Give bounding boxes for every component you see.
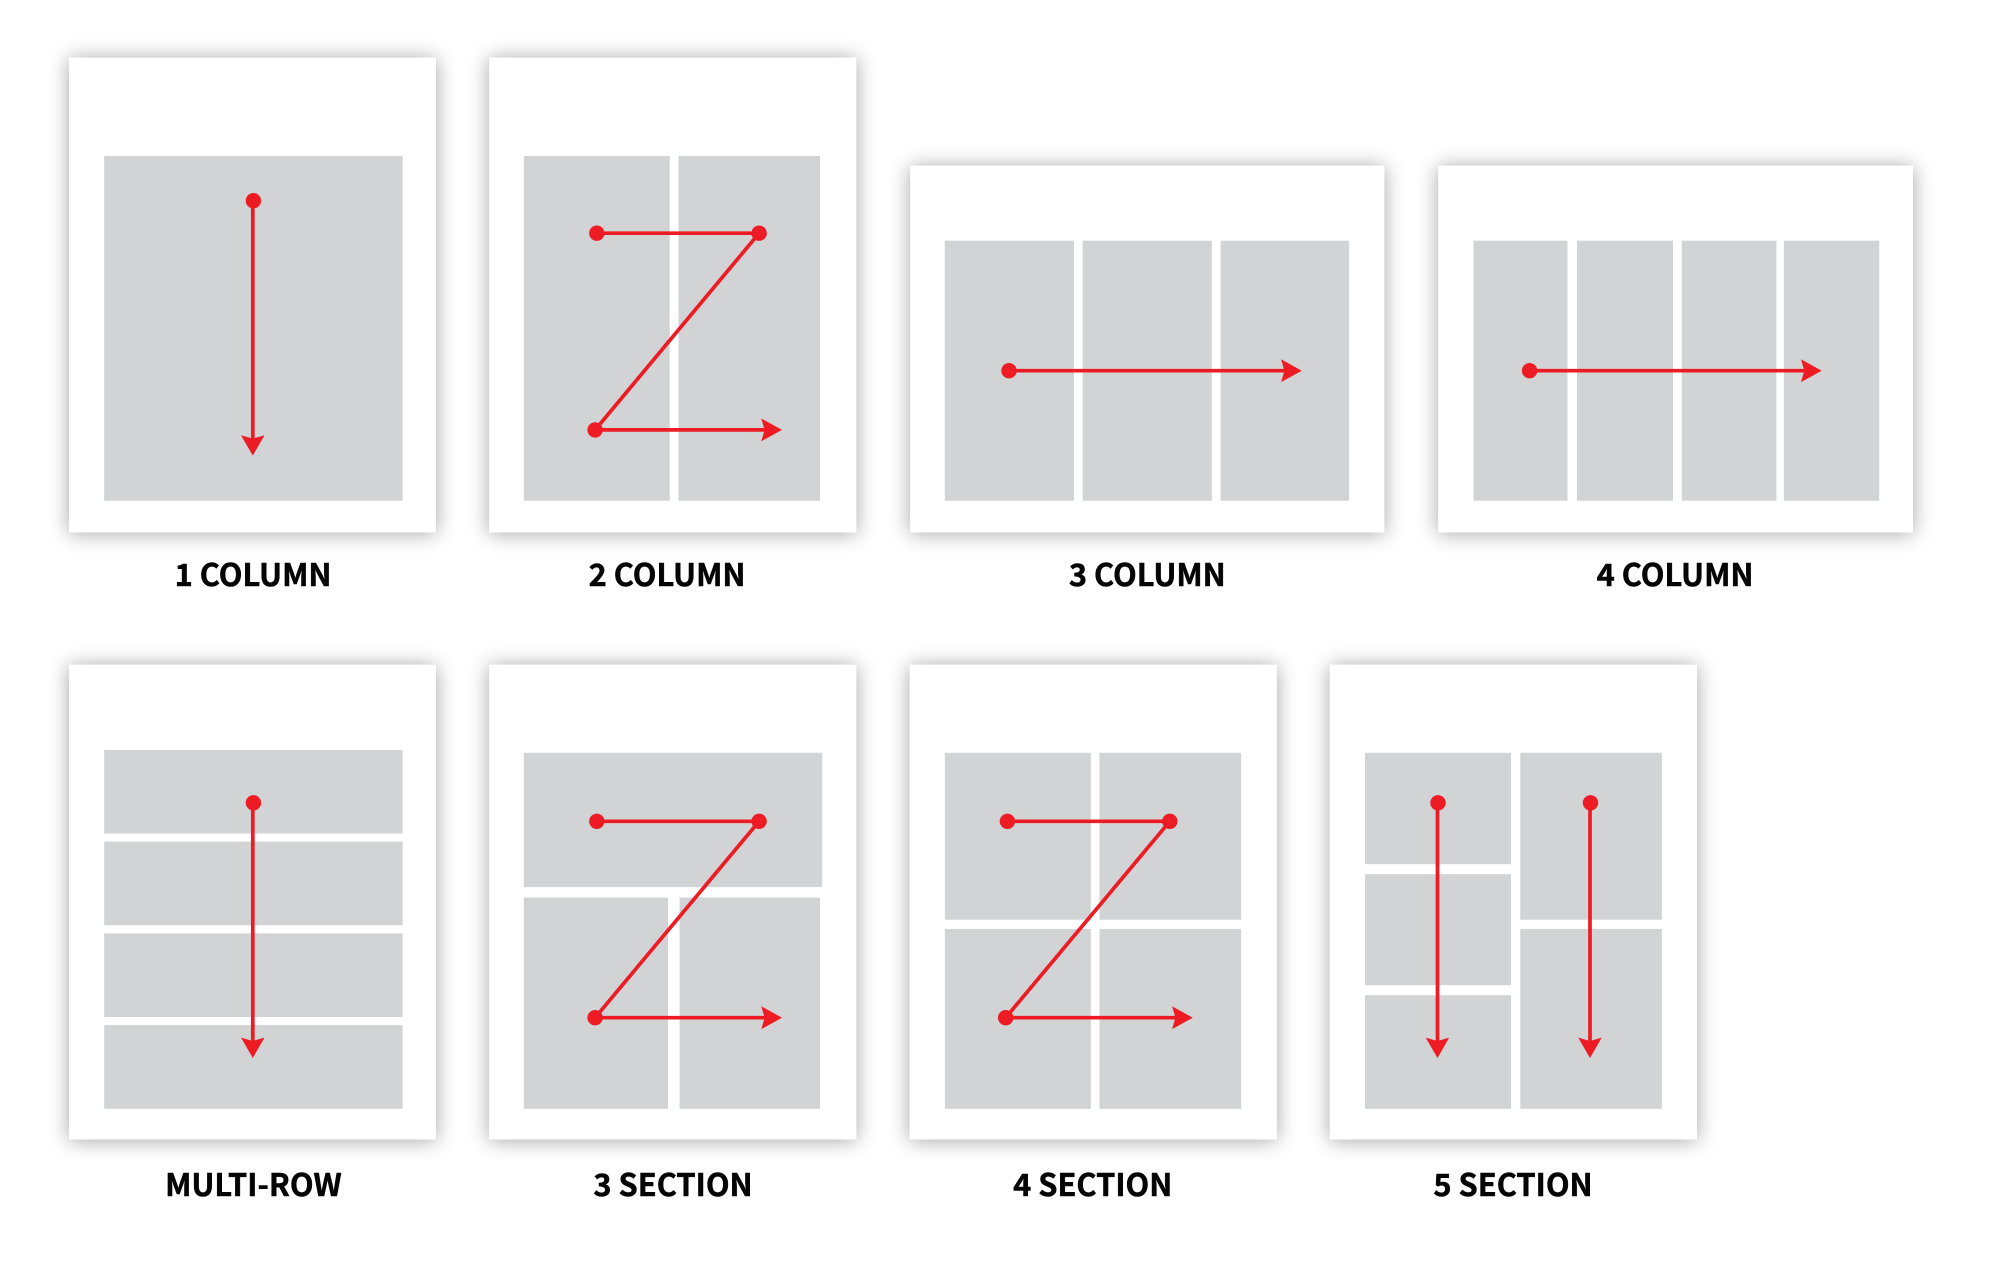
label: 1 column: 1 COLUMN [175,550,331,595]
arrow: Z reading path [587,814,782,1029]
panel: 3 section [489,665,856,1140]
label: 2 column: 2 COLUMN [589,550,745,595]
label: 4 column: 4 COLUMN [1597,550,1753,595]
panel: 2 column [489,58,856,532]
label: multi-row: MULTI-ROW [165,1160,342,1205]
label: 5 section: 5 SECTION [1433,1160,1593,1205]
arrow: Z reading path [998,814,1193,1029]
label: 4 section: 4 SECTION [1013,1160,1172,1205]
panel: 3 column [910,166,1384,532]
label: 3 section: 3 SECTION [593,1160,753,1205]
arrow: left column reading path [1426,795,1449,1058]
arrow: horizontal reading path [1001,359,1302,382]
panel: 4 section [910,665,1277,1140]
arrow: right column reading path [1578,795,1602,1058]
arrow: top to bottom reading path [241,795,264,1058]
arrow: top to bottom reading path [241,193,264,456]
panel: 4 column [1438,166,1913,532]
arrow: horizontal reading path [1522,359,1822,382]
panel: multi-row [69,665,436,1140]
panel: 5 section [1330,665,1697,1140]
arrow: Z reading path [587,226,782,441]
label: 3 column: 3 COLUMN [1069,550,1226,595]
panel: 1 column [69,58,436,532]
